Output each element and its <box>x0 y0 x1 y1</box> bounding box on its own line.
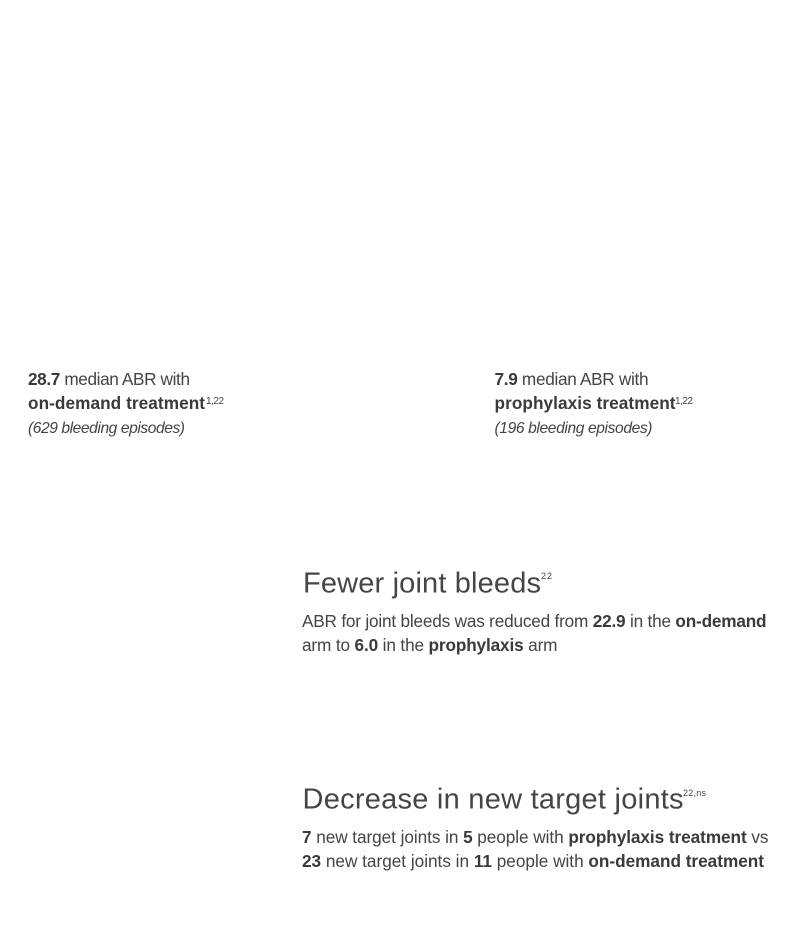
text block: on-demand treatment median ABR: 28.7 median ABR with <box>28 369 190 389</box>
text block: prophylaxis treatment median ABR: 1,22 <box>675 396 693 407</box>
heading: fewer joint bleeds: 22 <box>541 571 552 581</box>
text block: new target joints comparison <box>302 827 768 871</box>
text block: on-demand treatment median ABR <box>28 369 224 437</box>
text block: prophylaxis treatment median ABR: 7.9 median ABR with <box>494 369 648 389</box>
heading: decrease in new target joints: Decrease in new target joints <box>302 784 684 816</box>
text block: on-demand treatment median ABR: 1,22 <box>206 396 224 407</box>
text block: joint bleed reduction: ABR for joint bleeds was reduced from 22.9 in the on-demand <box>302 611 766 631</box>
text block: new target joints comparison: 23 new target joints in 11 people with on-demand treatment <box>302 851 764 871</box>
text block: new target joints comparison: 7 new target joints in 5 people with prophylaxis treatment vs <box>302 827 768 847</box>
heading: decrease in new target joints: 22,ns <box>683 788 706 798</box>
text block: prophylaxis treatment median ABR <box>494 369 693 437</box>
heading: fewer joint bleeds: Fewer joint bleeds <box>303 568 541 600</box>
text block: prophylaxis treatment median ABR: (196 bleeding episodes) <box>494 420 652 437</box>
text block: on-demand treatment median ABR: on-demand treatment <box>28 393 205 413</box>
text block: on-demand treatment median ABR: (629 bleeding episodes) <box>28 420 185 437</box>
text block: prophylaxis treatment median ABR: prophylaxis treatment <box>494 393 676 413</box>
text block: joint bleed reduction: arm to 6.0 in the prophylaxis arm <box>302 635 558 655</box>
section: fewer joint bleeds <box>302 568 766 655</box>
text block: joint bleed reduction <box>302 611 766 655</box>
section: decrease in new target joints <box>302 784 768 871</box>
